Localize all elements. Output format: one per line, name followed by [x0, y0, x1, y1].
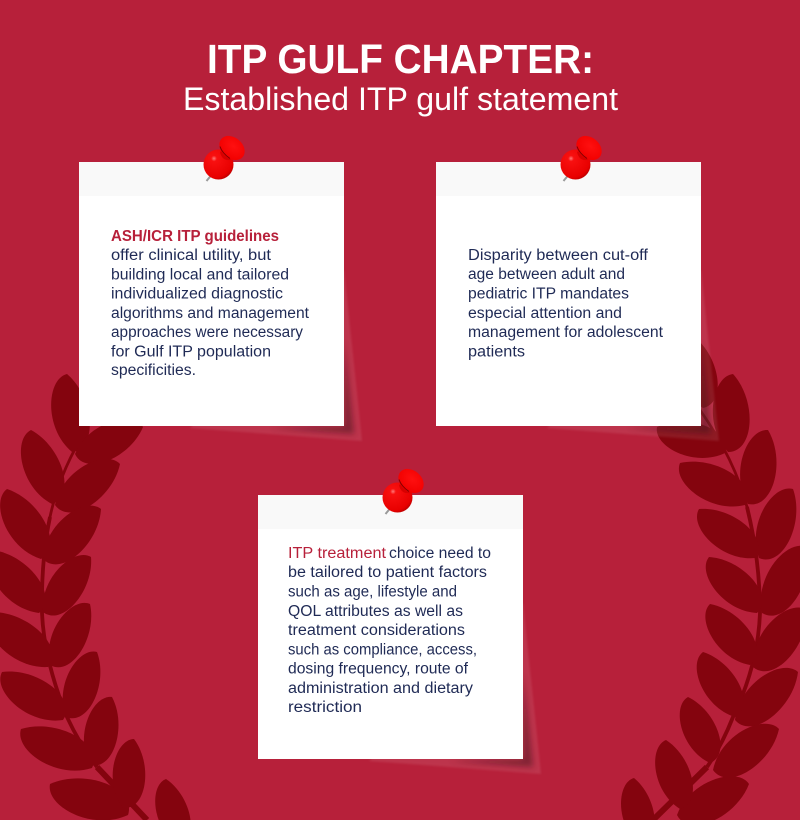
note text: QOL attributes as well as — [288, 603, 463, 620]
note top band — [258, 495, 523, 529]
note text: pediatric ITP mandates — [468, 286, 629, 302]
note sheet — [258, 495, 523, 759]
note text: restriction — [288, 699, 362, 716]
note text: specificities. — [111, 362, 196, 379]
note text: ASH/ICR ITP guidelines — [111, 228, 279, 245]
note text: treatment considerations — [288, 622, 465, 639]
note text — [288, 545, 491, 716]
panel: treatment choice note — [258, 464, 541, 774]
note shadow — [190, 270, 362, 441]
note text: be tailored to patient factors — [288, 564, 487, 581]
note text: building local and tailored — [111, 266, 289, 284]
note text: approaches were necessary — [111, 324, 303, 341]
icon: push pin — [560, 131, 606, 181]
note text: dosing frequency, route of — [288, 660, 469, 678]
panel: guidelines note — [79, 131, 362, 441]
note shadow — [369, 603, 541, 774]
note text: Disparity between cut-off — [468, 247, 649, 264]
note text: for Gulf ITP population — [111, 344, 271, 360]
title line 1: ITP GULF CHAPTER: — [207, 36, 594, 82]
note sheet — [79, 162, 344, 426]
note text — [111, 228, 310, 379]
note text: age between adult and — [468, 266, 625, 283]
note top band — [436, 162, 701, 196]
note text: offer clinical utility, but — [111, 247, 272, 264]
note text: ITP treatment — [288, 545, 387, 562]
note text: administration and dietary — [288, 680, 473, 697]
note text: such as age, lifestyle and — [288, 584, 457, 600]
title — [183, 36, 618, 117]
note text: individualized diagnostic — [111, 286, 283, 302]
note text: patients — [468, 344, 525, 360]
right laurel branch — [619, 332, 800, 831]
icon: push pin — [382, 464, 428, 514]
note top band — [79, 162, 344, 196]
left laurel branch — [0, 373, 195, 831]
note text: management for adolescent — [468, 324, 664, 341]
note text: choice need to — [389, 545, 491, 562]
note text: algorithms and management — [111, 305, 310, 322]
bottom white strip — [0, 820, 800, 831]
note text: especial attention and — [468, 305, 622, 322]
title line 2: Established ITP gulf statement — [183, 81, 618, 117]
note text: such as compliance, access, — [288, 642, 477, 658]
note sheet — [436, 162, 701, 426]
icon: push pin — [204, 131, 249, 181]
panel: adolescent cut-off note — [436, 131, 719, 441]
note text — [468, 247, 664, 360]
note shadow — [547, 270, 719, 441]
